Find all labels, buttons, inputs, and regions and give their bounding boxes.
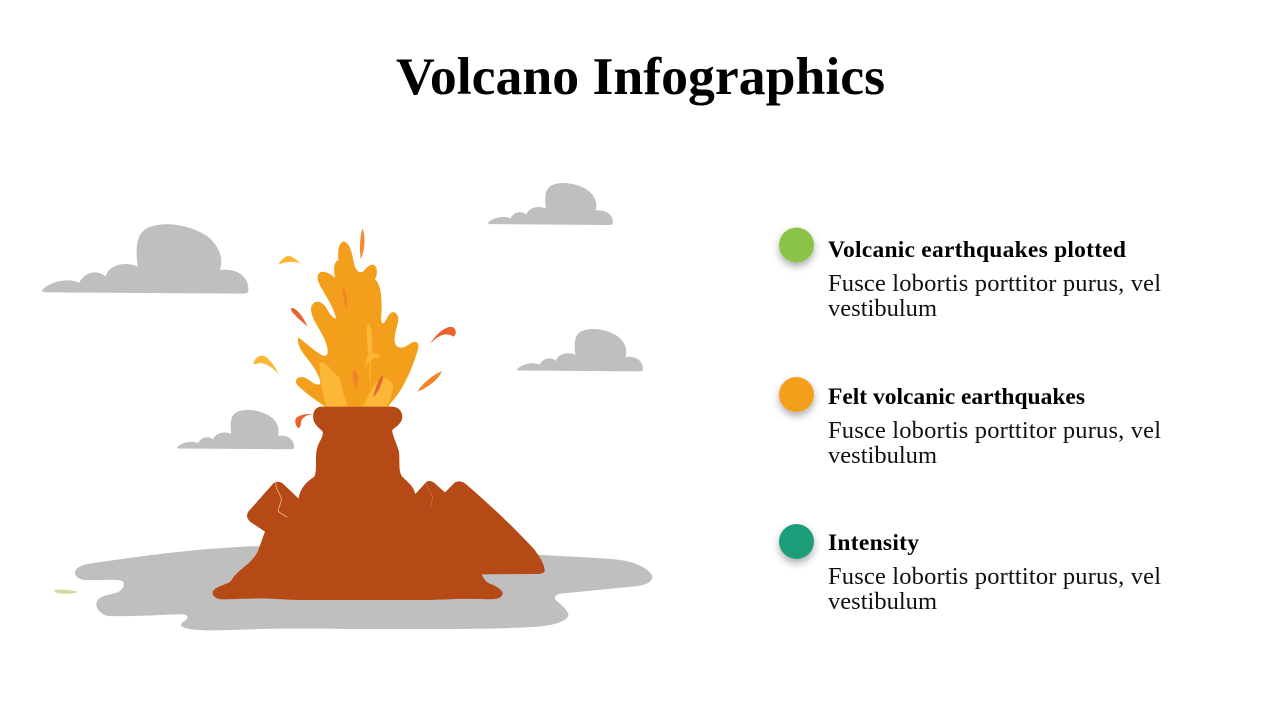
volcano body bbox=[212, 407, 545, 600]
description: Fusce lobortis porttitor purus, vel bbox=[828, 417, 1161, 444]
flame light lower left bbox=[319, 362, 348, 407]
description: Fusce lobortis porttitor purus, vel bbox=[828, 270, 1161, 297]
crack left bbox=[276, 483, 287, 517]
flame light lower right bbox=[363, 379, 393, 407]
cloud: small near volcano bbox=[177, 410, 294, 449]
crack right bbox=[427, 483, 433, 508]
description line two: vestibulum bbox=[828, 588, 937, 615]
inner flame strip bbox=[343, 286, 347, 310]
cloud: middle right bbox=[517, 329, 643, 371]
description line two: vestibulum bbox=[828, 442, 937, 469]
heading: Felt volcanic earthquakes bbox=[828, 384, 1085, 410]
spark orange right bbox=[417, 371, 442, 392]
flame and sparks bbox=[253, 228, 456, 407]
volcano bbox=[212, 407, 545, 600]
spark red left bbox=[291, 308, 308, 327]
small puddle bbox=[54, 589, 78, 594]
heading: Volcanic earthquakes plotted bbox=[828, 237, 1126, 263]
flame body bbox=[296, 241, 418, 407]
spark upper left bbox=[278, 256, 302, 265]
spark yellow left bbox=[253, 356, 279, 374]
flame light center bbox=[364, 323, 380, 392]
description: Fusce lobortis porttitor purus, vel bbox=[828, 563, 1161, 590]
spark at crater bbox=[295, 414, 313, 428]
description line two: vestibulum bbox=[828, 295, 937, 322]
spark red right bbox=[430, 327, 456, 344]
spark top bbox=[360, 228, 365, 259]
ground shadow bbox=[54, 546, 652, 630]
legend item: intensity bbox=[779, 524, 1161, 615]
title: Volcano Infographics bbox=[396, 48, 885, 106]
inner red drop bbox=[373, 375, 383, 397]
inner orange drop bbox=[353, 369, 358, 388]
cloud: large left bbox=[42, 224, 248, 294]
marker green bbox=[779, 228, 814, 262]
heading: Intensity bbox=[828, 530, 919, 556]
legend item: volcanic earthquakes plotted bbox=[779, 228, 1161, 322]
cloud: top right bbox=[488, 183, 613, 225]
marker teal bbox=[779, 524, 814, 559]
marker orange bbox=[779, 377, 814, 412]
legend item: felt volcanic earthquakes bbox=[779, 377, 1161, 469]
